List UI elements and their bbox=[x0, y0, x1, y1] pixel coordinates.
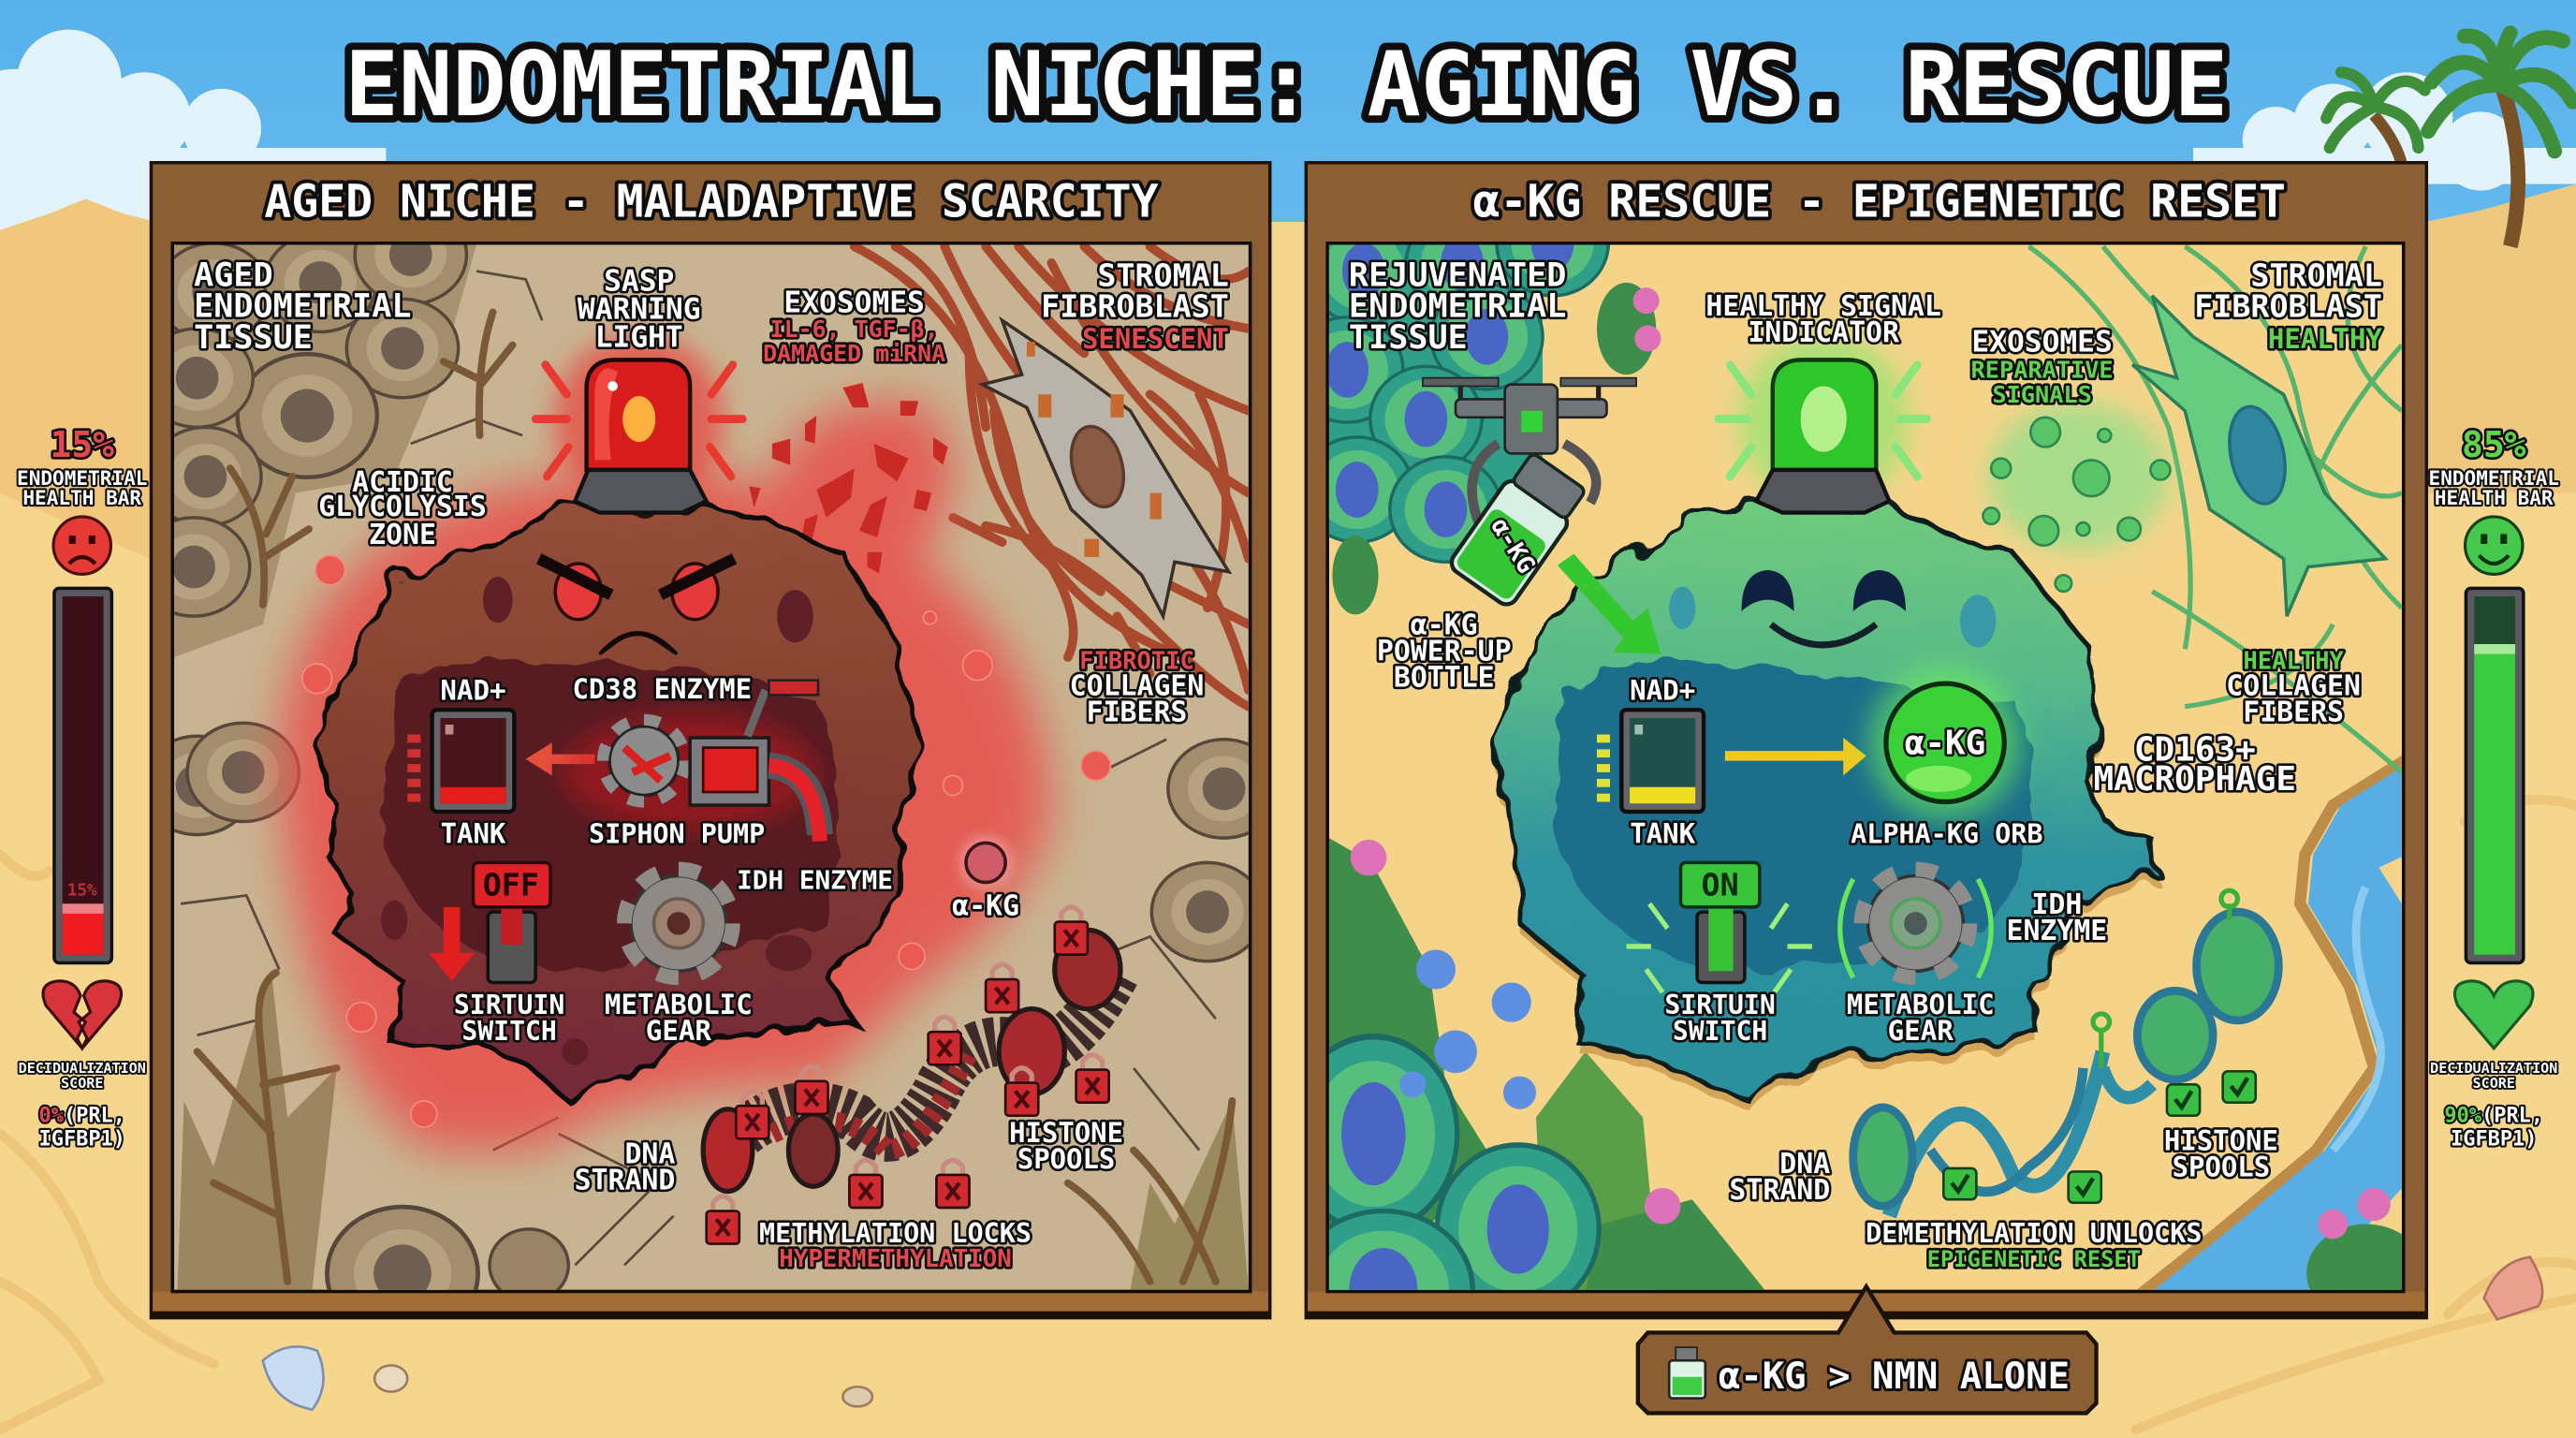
label: tank: TANK bbox=[441, 817, 506, 849]
label: aged endometrial tissue: TISSUE bbox=[194, 318, 313, 357]
label: decidualization score bbox=[2430, 1060, 2557, 1092]
icon: sirtuin switch on bbox=[1627, 862, 1812, 992]
callout: alpha-KG beats NMN alone bbox=[1638, 1286, 2097, 1413]
label: stromal fibroblast senescent bbox=[1041, 257, 1229, 355]
icon: NAD+ tank drained bbox=[407, 710, 514, 812]
label: endometrial health bar bbox=[2429, 466, 2559, 509]
blob spots bbox=[381, 577, 813, 1064]
label: DNA strand: DNA bbox=[624, 1138, 675, 1171]
drone bbox=[1423, 378, 1636, 522]
panel: alpha-KG rescue bbox=[1290, 161, 2428, 1369]
icon: sirtuin switch off bbox=[473, 862, 550, 983]
label: healthy signal indicator: INDICATOR bbox=[1748, 316, 1899, 349]
label: SASP warning light bbox=[578, 265, 701, 354]
switch text: OFF bbox=[483, 867, 539, 903]
label: DNA strand bbox=[1729, 1148, 1830, 1207]
icon: broken heart bbox=[43, 981, 122, 1049]
bar: health 15 percent bbox=[54, 588, 111, 962]
icons: damaged exosomes bbox=[749, 383, 948, 574]
label: demethylation unlocks: EPIGENETIC RESET bbox=[1927, 1246, 2141, 1272]
label: sirtuin switch: SIRTUIN bbox=[1664, 990, 1776, 1020]
plant: bushes bbox=[1329, 283, 2425, 1323]
label: metabolic gear bbox=[605, 989, 753, 1047]
label: stromal fibroblast healthy: HEALTHY bbox=[2268, 323, 2382, 355]
flowers bbox=[1351, 287, 2391, 1239]
icon: happy face bbox=[2466, 517, 2523, 574]
icon: CD38 siphon pump bbox=[562, 681, 820, 842]
face: happy eyes and smile bbox=[1741, 570, 1906, 645]
glow: inflammatory red haze bbox=[279, 402, 1051, 1151]
icon: aged macrophage blob bbox=[315, 503, 920, 1099]
label: 90 percent PRL IGFBP1: 90%(PRL, bbox=[2444, 1105, 2543, 1128]
label: CD163+ macrophage: CD163+ bbox=[2134, 731, 2256, 770]
blob inner dark zone bbox=[381, 661, 838, 970]
label: sirtuin switch: SWITCH bbox=[1673, 1016, 1767, 1047]
label: decidualization score: SCORE bbox=[2473, 1075, 2515, 1092]
label: endometrial health bar: HEALTH BAR bbox=[2435, 486, 2554, 509]
label: decidualization score bbox=[19, 1060, 146, 1092]
panel frame: aged niche bbox=[150, 161, 1271, 1319]
icon: metabolic gear healthy bbox=[1840, 869, 1991, 977]
label: IDH enzyme bbox=[2007, 888, 2107, 947]
arrow: bottle into blob bbox=[1558, 553, 1661, 654]
label: stromal fibroblast healthy: FIBROBLAST bbox=[2194, 288, 2382, 325]
blob spots bbox=[1669, 587, 1996, 648]
label: stromal fibroblast senescent: STROMAL bbox=[1097, 257, 1229, 293]
label: endometrial health bar: ENDOMETRIAL bbox=[17, 466, 147, 490]
icon: healthy signal indicator bbox=[1719, 333, 1927, 513]
label: stromal fibroblast healthy: STROMAL bbox=[2250, 257, 2382, 293]
label: NAD+: NAD+ bbox=[1630, 675, 1695, 707]
icon: pebble bbox=[842, 1387, 872, 1406]
label: CD163+ macrophage: MACROPHAGE bbox=[2094, 760, 2296, 799]
sidebar: aged health meter bbox=[17, 424, 147, 1151]
icon: sad face bbox=[53, 517, 110, 574]
label: exosomes reparative signals: EXOSOMES bbox=[1971, 326, 2113, 360]
scene: cracked tissue bbox=[174, 245, 1249, 1290]
label: aged endometrial tissue: AGED bbox=[194, 256, 273, 294]
label: IDH enzyme: IDH ENZYME bbox=[737, 865, 893, 896]
value: 85 percent: 85% bbox=[2462, 424, 2526, 465]
label: histone spools bbox=[2164, 1125, 2278, 1183]
label: alpha-KG: α-KG bbox=[952, 890, 1019, 923]
label: metabolic gear: METABOLIC bbox=[1847, 989, 1995, 1020]
label: alpha-KG power-up bottle: BOTTLE bbox=[1394, 662, 1495, 695]
label: 90 percent PRL IGFBP1 bbox=[2444, 1105, 2543, 1151]
panel: aged niche bbox=[138, 161, 1280, 1340]
label: DNA strand: DNA bbox=[1779, 1148, 1830, 1181]
label: acidic glycolysis zone: ACIDIC bbox=[352, 466, 453, 499]
label: fibrotic collagen fibers: FIBERS bbox=[1087, 696, 1187, 728]
label: histone spools bbox=[1009, 1117, 1123, 1175]
label: exosomes reparative signals bbox=[1971, 326, 2114, 408]
icon: green heart bbox=[2454, 981, 2533, 1049]
label: sirtuin switch: SWITCH bbox=[461, 1016, 557, 1047]
cells: aged endometrial cells bbox=[138, 205, 1280, 1340]
label: NAD+: NAD+ bbox=[440, 675, 506, 707]
label: stromal fibroblast senescent: SENESCENT bbox=[1082, 323, 1229, 355]
orb label: α-KG bbox=[1905, 725, 1985, 763]
cells: large healthy cells bbox=[1290, 1036, 1599, 1369]
label: aged endometrial tissue: ENDOMETRIAL bbox=[194, 287, 412, 326]
blob inner dark zone bbox=[1553, 659, 2031, 971]
label: decidualization score: DECIDUALIZATION bbox=[2430, 1060, 2557, 1077]
icons: methylation locks bbox=[707, 907, 1109, 1244]
bottle label: α-KG bbox=[1485, 513, 1540, 579]
label: 0 percent PRL IGFBP1: 0%(PRL, bbox=[39, 1105, 125, 1128]
panel header: rescue: α-KG RESCUE - EPIGENETIC RESET bbox=[1473, 176, 2286, 228]
icon: blue shell bbox=[263, 1346, 324, 1410]
icon: unlocked chromatin, helix and spools bbox=[1853, 890, 2278, 1216]
label: sirtuin switch bbox=[1664, 990, 1776, 1047]
label: decidualization score: SCORE bbox=[61, 1075, 103, 1092]
bar: health 85 percent bbox=[2466, 588, 2524, 962]
label: decidualization score: DECIDUALIZATION bbox=[19, 1060, 146, 1077]
cells: healthy endometrial bbox=[1292, 191, 1608, 562]
label: alpha-KG power-up bottle bbox=[1377, 609, 1512, 695]
label: healthy collagen fibers bbox=[2226, 646, 2361, 728]
bar value: 15% bbox=[67, 882, 97, 901]
label: metabolic gear bbox=[1847, 989, 1995, 1047]
label: DNA strand bbox=[575, 1138, 675, 1197]
label: acidic glycolysis zone: ZONE bbox=[369, 519, 436, 551]
callout text: α-KG > NMN ALONE bbox=[1719, 1356, 2070, 1398]
label: alpha-KG power-up bottle: α-KG bbox=[1411, 609, 1478, 641]
label: rejuvenated endometrial tissue bbox=[1349, 256, 1566, 357]
icon: small bottle bbox=[1669, 1347, 1705, 1399]
river bbox=[2136, 759, 2425, 1323]
bottle bbox=[1447, 449, 1590, 609]
label: methylation locks: HYPERMETHYLATION bbox=[779, 1245, 1012, 1273]
label: DNA strand: STRAND bbox=[575, 1165, 675, 1197]
panel frame: rescue bbox=[1305, 161, 2428, 1319]
panel header: aged niche: AGED NICHE - MALADAPTIVE SCARCITY bbox=[264, 176, 1159, 228]
label: IDH enzyme: ENZYME bbox=[2007, 915, 2107, 947]
icon: small pebble bbox=[374, 1365, 407, 1392]
label: exosomes bbox=[763, 286, 945, 367]
label: DNA strand: STRAND bbox=[1729, 1174, 1830, 1207]
label: acidic glycolysis zone bbox=[318, 466, 487, 551]
label: methylation locks bbox=[759, 1218, 1032, 1273]
label: SASP warning light: LIGHT bbox=[595, 320, 683, 354]
label: stromal fibroblast senescent: FIBROBLAST bbox=[1041, 288, 1229, 325]
plants: dry twigs and brush bbox=[178, 312, 1249, 1290]
switch text: ON bbox=[1702, 867, 1739, 903]
glow: green exosome haze bbox=[1988, 403, 2169, 550]
label: endometrial health bar: HEALTH BAR bbox=[22, 486, 141, 509]
label: fibrotic collagen fibers: FIBROTIC bbox=[1079, 646, 1194, 674]
label: SASP warning light: WARNING bbox=[578, 292, 701, 326]
label: methylation locks: METHYLATION LOCKS bbox=[759, 1218, 1032, 1249]
icons: reparative exosomes bbox=[1983, 418, 2170, 592]
label: rejuvenated endometrial tissue: TISSUE bbox=[1349, 318, 1468, 357]
label: alpha-KG power-up bottle: POWER-UP bbox=[1377, 636, 1512, 668]
background: left dune bbox=[0, 198, 150, 559]
icon: rejuvenated macrophage blob bbox=[1493, 503, 2159, 1109]
background: sand streaks bbox=[0, 800, 2576, 1430]
label: exosomes reparative signals: REPARATIVE bbox=[1971, 357, 2114, 384]
label: CD38 enzyme: CD38 ENZYME bbox=[572, 673, 752, 705]
label: endometrial health bar bbox=[17, 466, 147, 509]
background: left cloud bbox=[0, 30, 386, 230]
label: siphon pump: SIPHON PUMP bbox=[589, 818, 765, 849]
face: angry eyes and frown bbox=[539, 559, 735, 654]
icons: red droplets bbox=[302, 555, 1110, 1127]
icon: small palm tree bbox=[2326, 72, 2425, 165]
title: ENDOMETRIAL NICHE: AGING VS. RESCUE bbox=[344, 32, 2228, 137]
label: histone spools: HISTONE bbox=[2164, 1125, 2278, 1157]
icon: metabolic gear rusty bbox=[624, 869, 733, 977]
label: exosomes reparative signals: SIGNALS bbox=[1992, 381, 2092, 408]
labels: rescue panel bbox=[1349, 256, 2382, 1272]
fibers: healthy collagen bbox=[2029, 246, 2402, 772]
icon: SASP warning light bbox=[535, 333, 742, 513]
label: healthy signal indicator: HEALTHY SIGNAL bbox=[1705, 290, 1941, 323]
label: 90 percent PRL IGFBP1: IGFBP1) bbox=[2451, 1127, 2537, 1151]
label: healthy collagen fibers: HEALTHY bbox=[2244, 646, 2344, 674]
labels: aged panel bbox=[194, 256, 1229, 1273]
label: SASP warning light: SASP bbox=[604, 265, 674, 299]
cracks bbox=[181, 271, 1216, 1265]
label: 0 percent PRL IGFBP1 bbox=[39, 1105, 125, 1151]
label: fibrotic collagen fibers: COLLAGEN bbox=[1070, 669, 1204, 702]
label: metabolic gear: GEAR bbox=[1888, 1015, 1954, 1047]
label: histone spools: SPOOLS bbox=[1017, 1143, 1115, 1175]
fibers: fibrotic collagen bbox=[855, 246, 1249, 707]
label: healthy collagen fibers: COLLAGEN bbox=[2226, 669, 2361, 702]
label: rejuvenated endometrial tissue: ENDOMETRIAL bbox=[1349, 287, 1566, 326]
label: stromal fibroblast healthy bbox=[2194, 257, 2382, 355]
icon: healthy fibroblast bbox=[2132, 296, 2385, 616]
label: IDH enzyme: IDH bbox=[2031, 888, 2082, 921]
label: demethylation unlocks bbox=[1866, 1218, 2202, 1272]
icons: demethylation checks bbox=[1943, 1071, 2256, 1203]
label: alpha-KG orb: ALPHA-KG ORB bbox=[1851, 818, 2042, 849]
icon: faded alpha-KG orb bbox=[958, 835, 1014, 890]
value: 15 percent: 15% bbox=[51, 424, 114, 465]
icon: drone carrying bottle bbox=[1423, 378, 1636, 609]
arrow: NAD+ draining to tank bbox=[526, 742, 594, 775]
label: metabolic gear: GEAR bbox=[646, 1015, 711, 1047]
label: exosomes: EXOSOMES bbox=[783, 286, 925, 319]
label: healthy signal indicator bbox=[1705, 290, 1941, 349]
label: acidic glycolysis zone: GLYCOLYSIS bbox=[318, 491, 487, 523]
icon: senescent fibroblast bbox=[983, 320, 1229, 616]
label: metabolic gear: METABOLIC bbox=[605, 989, 753, 1020]
icon: locked chromatin and histone spools bbox=[703, 907, 1120, 1244]
label: healthy collagen fibers: FIBERS bbox=[2243, 696, 2344, 728]
label: rejuvenated endometrial tissue: REJUVENATED bbox=[1349, 256, 1566, 294]
label: CD163+ macrophage bbox=[2094, 731, 2296, 799]
label: demethylation unlocks: DEMETHYLATION UNLOCKS bbox=[1866, 1218, 2202, 1249]
label: sirtuin switch: SIRTUIN bbox=[454, 990, 564, 1020]
label: histone spools: SPOOLS bbox=[2173, 1152, 2270, 1183]
label: fibrotic collagen fibers bbox=[1070, 646, 1204, 728]
label: endometrial health bar: ENDOMETRIAL bbox=[2429, 466, 2559, 490]
icon: NAD+ tank full bbox=[1597, 710, 1704, 812]
icon: alpha-KG orb bbox=[1868, 666, 2023, 820]
label: sirtuin switch bbox=[454, 990, 564, 1047]
background: right dune bbox=[2425, 184, 2576, 493]
sidebar: rescue health meter bbox=[2429, 424, 2559, 1151]
label: exosomes: DAMAGED miRNA bbox=[763, 340, 945, 367]
icon: big palm tree bbox=[2428, 33, 2572, 246]
scene: healthy tissue bbox=[1329, 245, 2402, 1290]
icon: pink shell bbox=[2484, 1257, 2542, 1319]
label: tank: TANK bbox=[1630, 817, 1696, 849]
label: exosomes: IL-6, TGF-β, bbox=[770, 315, 939, 343]
label: histone spools: HISTONE bbox=[1009, 1117, 1123, 1149]
label: 0 percent PRL IGFBP1: IGFBP1) bbox=[39, 1127, 125, 1151]
arrow: sirtuin down bbox=[429, 907, 475, 981]
label: aged endometrial tissue bbox=[194, 256, 412, 357]
background: right cloud bbox=[2193, 72, 2576, 191]
arrow: tank to orb bbox=[1725, 738, 1866, 775]
